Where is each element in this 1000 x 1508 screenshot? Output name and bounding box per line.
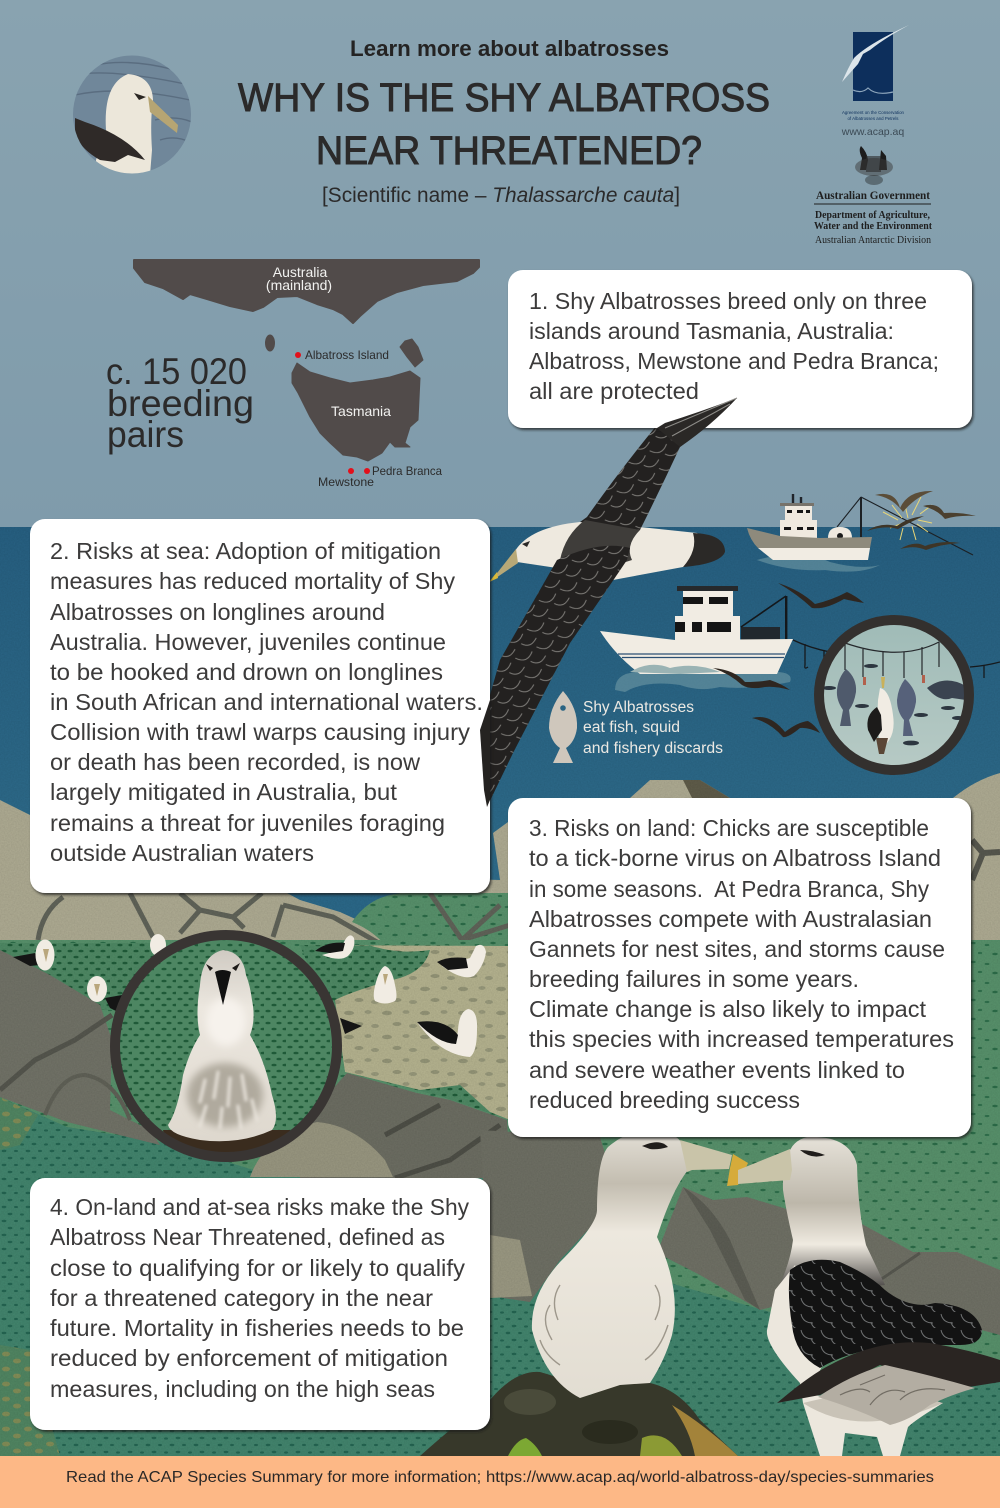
nesting bird 2 bbox=[87, 976, 122, 1012]
population figure: breeding bbox=[107, 383, 254, 424]
breeding site: Albatross Island: Albatross Island bbox=[305, 348, 389, 362]
text panel 3: risks on land: Climate change is also likely to impact bbox=[529, 996, 926, 1022]
seabird 4 bbox=[900, 542, 960, 550]
wing tip overlapping panel 1 bbox=[657, 398, 737, 447]
department lines: Department of Agriculture, bbox=[815, 210, 930, 221]
kicker: Learn more about albatrosses bbox=[350, 36, 669, 61]
diet text: eat fish, squid bbox=[583, 719, 680, 736]
hanging fish 2 bbox=[897, 679, 916, 736]
website: www.acap.aq bbox=[841, 126, 904, 138]
left adult eye bbox=[642, 1142, 668, 1149]
logo albatross bbox=[842, 25, 909, 82]
right adult bbox=[738, 1137, 1000, 1456]
text panel 2: risks at sea: in South African and international waters. bbox=[50, 689, 483, 715]
hanging fish 1 bbox=[837, 669, 856, 726]
text panel 2: risks at sea: measures has reduced mortality of Shy bbox=[50, 568, 455, 594]
logo caption: Agreement on the Conservation bbox=[842, 110, 905, 115]
wake bbox=[757, 554, 880, 572]
map: Australia and Tasmania bbox=[134, 260, 479, 489]
population figure: c. 15 020 bbox=[106, 351, 247, 392]
text panel 4: conclusion: reduced by enforcement of mitigation bbox=[50, 1345, 448, 1371]
text panel 2: risks at sea bbox=[30, 519, 490, 893]
tan rocks behind the colony bbox=[0, 773, 1000, 945]
right adult eye bbox=[800, 1150, 825, 1157]
nesting bird 8 bbox=[340, 1018, 362, 1034]
Flinders Island bbox=[400, 339, 423, 367]
background: island landscape bbox=[0, 527, 1000, 1456]
pair of albatrosses courting bbox=[420, 1130, 1000, 1456]
logo: ACAP bbox=[841, 25, 909, 138]
text panel 3: risks on land: 3. Risks on land: Chicks are susceptible bbox=[529, 815, 929, 841]
nest bbox=[163, 1130, 290, 1152]
text panel 1: breeding islands: all are protected bbox=[529, 378, 699, 404]
breeding site: Pedra Branca: Pedra Branca bbox=[372, 464, 442, 478]
footer bar: Read the ACAP Species Summary for more information; https://www.acap.aq/world-albatross-day/species-summaries bbox=[66, 1469, 934, 1486]
left adult bill tip bbox=[727, 1154, 748, 1186]
Australian mainland bbox=[134, 260, 479, 323]
text panel 1: breeding islands bbox=[508, 270, 972, 428]
ground base bbox=[0, 940, 1000, 1456]
left adult bbox=[532, 1130, 748, 1398]
inset circle: fish on hooks bbox=[819, 620, 969, 770]
text panel 2: risks at sea: Australia. However, juveniles continue bbox=[50, 629, 446, 655]
scientific name: [Scientific name – Thalassarche cauta] bbox=[322, 183, 680, 207]
background: sea bbox=[0, 527, 1000, 927]
tail feather lines bbox=[840, 1375, 945, 1405]
footer bar bbox=[0, 1456, 1000, 1508]
beak bbox=[215, 970, 231, 1005]
near fishing boat bbox=[600, 586, 793, 692]
King Island bbox=[265, 334, 275, 352]
text panel 4: conclusion: Albatross Near Threatened, defined as bbox=[50, 1224, 445, 1250]
map labels: mainland: Australia bbox=[273, 264, 327, 280]
Tasmania bbox=[292, 363, 420, 461]
hooked albatross bbox=[867, 677, 894, 754]
text panel 2: risks at sea: or death has been recorded, is now bbox=[50, 749, 421, 775]
text panel 4: conclusion: close to qualifying for or likely to qualify bbox=[50, 1255, 465, 1281]
deck box and mast bbox=[741, 596, 787, 640]
text panel 2: risks at sea: remains a threat for juveniles foraging bbox=[50, 810, 445, 836]
nesting bird 7 bbox=[417, 1009, 477, 1057]
diet text bbox=[583, 699, 723, 757]
text panel 3: risks on land: Albatrosses compete with Australasian bbox=[529, 906, 932, 932]
bridge bbox=[780, 503, 817, 538]
text panel 4: conclusion: for a threatened category in the near bbox=[50, 1285, 433, 1311]
right adult beak bbox=[738, 1149, 792, 1184]
title: WHY IS THE SHY ALBATROSS bbox=[238, 76, 770, 120]
right adult belly bbox=[767, 1265, 943, 1456]
rigging bbox=[837, 497, 973, 555]
wake bbox=[615, 667, 791, 692]
text panel 1: breeding islands: islands around Tasmania, Australia: bbox=[529, 318, 894, 344]
beak bbox=[490, 549, 518, 582]
nesting bird 3 bbox=[150, 934, 166, 956]
down tufts bbox=[200, 1072, 257, 1128]
upper cabin bbox=[677, 586, 738, 616]
population figure bbox=[106, 351, 254, 455]
text panel 1: breeding islands: Albatross, Mewstone and Pedra Branca; bbox=[529, 348, 939, 374]
text panel 2: risks at sea: 2. Risks at sea: Adoption of mitigation bbox=[50, 538, 441, 564]
text panel 3: risks on land bbox=[508, 798, 971, 1137]
nesting bird 5 bbox=[437, 945, 486, 977]
seabird 3 bbox=[867, 516, 924, 531]
text panel 3: risks on land: breeding failures in some years. bbox=[529, 966, 859, 992]
tail fan grey bbox=[818, 1365, 975, 1425]
large flying albatross bbox=[480, 398, 737, 807]
text panel 4: conclusion: 4. On-land and at-sea risks make the Shy bbox=[50, 1194, 469, 1220]
upper field: dark green left, tan right bbox=[0, 940, 1000, 1173]
body bbox=[515, 522, 725, 580]
map labels: mainland bbox=[266, 264, 332, 293]
funnels bbox=[793, 494, 801, 504]
hull bbox=[747, 528, 872, 560]
texture grain bbox=[0, 527, 1000, 1456]
text panel 3: risks on land: to a tick-borne virus on Albatross Island bbox=[529, 845, 941, 871]
seabird 1 bbox=[875, 491, 933, 512]
chest highlight bbox=[206, 998, 246, 1046]
small fish bbox=[822, 664, 964, 745]
near wing bbox=[480, 546, 630, 807]
grey boulders bbox=[0, 950, 1000, 1335]
header bbox=[238, 36, 770, 207]
text panel 2: risks at sea: largely mitigated in Australia, but bbox=[50, 779, 397, 805]
seabird 5 bbox=[778, 583, 864, 608]
mantle patch bbox=[560, 520, 640, 575]
department lines: Australian Antarctic Division bbox=[815, 235, 931, 246]
lower meadow bbox=[0, 1097, 1000, 1456]
mast bbox=[860, 497, 862, 537]
text panel 2: risks at sea: Albatrosses on longlines around bbox=[50, 599, 385, 625]
breeding site: Mewstone bbox=[318, 468, 374, 489]
diet text: and fishery discards bbox=[583, 740, 723, 757]
department lines bbox=[814, 210, 933, 246]
nesting bird 1 bbox=[13, 940, 54, 970]
right adult lower belly shade bbox=[803, 1385, 943, 1422]
longline with hooks bbox=[793, 640, 1000, 678]
text panel 3: risks on land: and severe weather events linked to bbox=[529, 1057, 905, 1083]
eyes bbox=[206, 963, 240, 971]
text panel 2: risks at sea: outside Australian waters bbox=[50, 840, 314, 866]
map labels: mainland: (mainland) bbox=[266, 277, 332, 293]
eye bbox=[522, 541, 530, 547]
background: sky bbox=[0, 0, 1000, 527]
far fishing boat bbox=[747, 494, 973, 572]
government name: Australian Government bbox=[816, 190, 930, 202]
spark lines bbox=[883, 497, 932, 540]
text panel 2: risks at sea: Collision with trawl warps causing injury bbox=[50, 719, 470, 745]
left adult wing marks bbox=[540, 1285, 668, 1365]
winch dome bbox=[828, 527, 852, 539]
nesting bird 4 bbox=[315, 935, 354, 959]
left adult beak bbox=[680, 1140, 732, 1172]
seabirds and sparks around far boat bbox=[752, 491, 976, 737]
logo caption bbox=[842, 110, 905, 121]
text panel 4: conclusion: future. Mortality in fisheries needs to be bbox=[50, 1315, 464, 1341]
hull wave bbox=[630, 665, 720, 674]
population figure: pairs bbox=[107, 414, 184, 455]
seabird 2 bbox=[923, 505, 976, 519]
breeding site: Mewstone: Mewstone bbox=[318, 475, 374, 489]
tail bbox=[683, 533, 725, 567]
inset circle: albatross chick on nest bbox=[115, 935, 337, 1157]
wing tip overlapping panel 2 bbox=[480, 700, 490, 807]
map label: Tasmania: Tasmania bbox=[331, 403, 391, 419]
grey down bbox=[187, 1063, 263, 1127]
swimming fish bbox=[927, 680, 966, 700]
coat of arms bbox=[855, 146, 893, 185]
chick body bbox=[168, 950, 276, 1141]
title bbox=[238, 76, 770, 173]
tail fan dark bbox=[777, 1342, 1000, 1403]
text panel 3: risks on land: reduced breeding success bbox=[529, 1087, 800, 1113]
seabird 7 bbox=[752, 717, 820, 737]
logo waves bbox=[853, 88, 893, 93]
hull bbox=[600, 631, 793, 674]
photo: shy albatross portrait bbox=[73, 56, 192, 175]
text panel 3: risks on land: in some seasons. At Pedra Branca, Shy bbox=[529, 876, 929, 902]
logo caption: of Albatrosses and Petrels bbox=[847, 116, 899, 121]
right adult wing bbox=[789, 1260, 982, 1368]
lower cabin bbox=[675, 616, 740, 642]
seabird crossing the bow bbox=[713, 668, 790, 690]
text panel 3: risks on land: Gannets for nest sites, and storms cause bbox=[529, 936, 945, 962]
department lines: Water and the Environment bbox=[814, 221, 933, 232]
logo: Australian Government bbox=[814, 146, 933, 246]
bill tip bbox=[489, 572, 498, 582]
text panel 2: risks at sea: to be hooked and drown on longlines bbox=[50, 659, 443, 685]
fish icon and diet note bbox=[549, 691, 723, 763]
nesting bird 6 bbox=[374, 966, 396, 1004]
title: NEAR THREATENED? bbox=[316, 129, 702, 173]
bait bbox=[863, 675, 925, 685]
text panel 3: risks on land: this species with increased temperatures bbox=[529, 1026, 954, 1052]
text panel 4: conclusion: measures, including on the high seas bbox=[50, 1376, 435, 1402]
far wing bbox=[580, 398, 737, 530]
mainline and snoods bbox=[845, 642, 939, 678]
text panel 1: breeding islands: 1. Shy Albatrosses breed only on three bbox=[529, 288, 927, 314]
text panel 4: conclusion bbox=[30, 1178, 490, 1430]
icon: fish bbox=[549, 691, 577, 763]
diet text: Shy Albatrosses bbox=[583, 699, 694, 716]
moss rock bbox=[420, 1372, 738, 1456]
colony of nesting albatrosses bbox=[13, 934, 486, 1057]
